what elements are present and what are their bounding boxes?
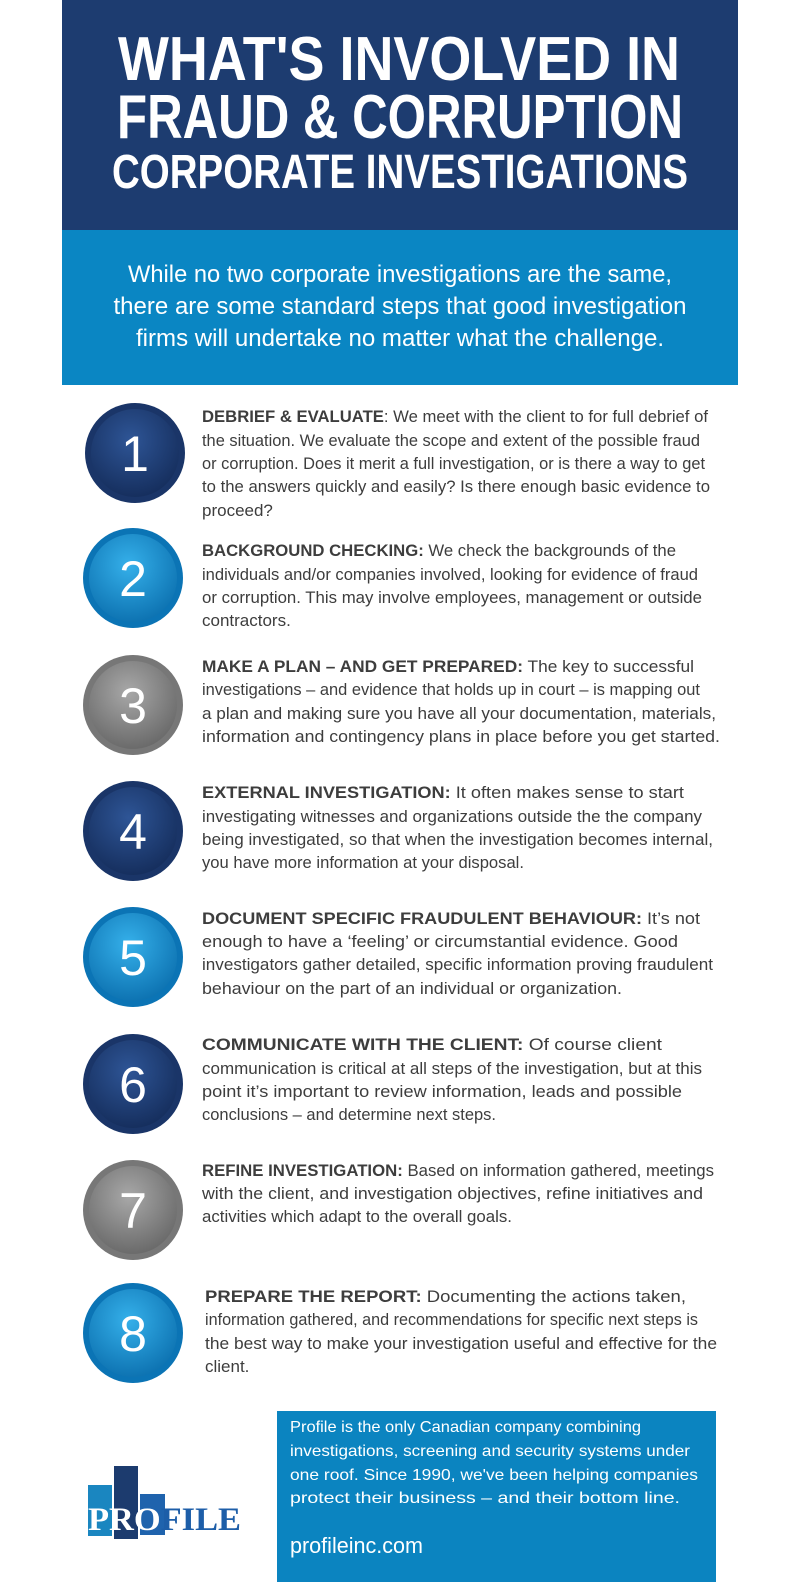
text: step 4: being investigated, so that when the investigation becomes internal, <box>202 830 713 849</box>
text: step 2: contractors. <box>202 611 291 630</box>
text: step 6 <box>202 1035 702 1124</box>
text: step 8: client. <box>205 1357 249 1376</box>
text: step 6: COMMUNICATE WITH THE CLIENT: Of course client <box>202 1035 662 1054</box>
icon: circle 2: 2 <box>119 551 147 607</box>
text: step 2: BACKGROUND CHECKING: We check the backgrounds of the <box>202 541 676 560</box>
text: step 4: you have more information at your disposal. <box>202 853 524 872</box>
logo: PROFILE <box>88 1466 241 1539</box>
icon: circle 3 <box>83 655 183 755</box>
text: step 3: investigations – and evidence that holds up in court – is mapping out <box>202 680 700 699</box>
step 8 <box>83 1283 717 1383</box>
text: step 6: communication is critical at all steps of the investigation, but at this <box>202 1059 702 1078</box>
text: step 2: or corruption. This may involve employees, management or outside <box>202 588 702 607</box>
icon: circle 4: 4 <box>119 804 147 860</box>
text: step 5: investigators gather detailed, specific information proving fraudulent <box>202 955 713 974</box>
text: step 8: the best way to make your investigation useful and effective for the <box>205 1334 717 1353</box>
footer callout: investigations, screening and security systems under <box>290 1443 691 1460</box>
text: step 1: proceed? <box>202 501 273 520</box>
icon: circle 7: 7 <box>119 1183 147 1239</box>
icon: circle 6: 6 <box>119 1057 147 1113</box>
intro band <box>62 230 738 385</box>
text: step 3 <box>202 657 720 746</box>
text: step 1 <box>202 407 710 520</box>
icon: circle 4 <box>83 781 183 881</box>
text: step 5: enough to have a ‘feeling’ or circumstantial evidence. Good <box>202 932 678 951</box>
icon: circle 8 <box>83 1283 183 1383</box>
text: step 8: PREPARE THE REPORT: Documenting the actions taken, <box>205 1287 686 1306</box>
footer callout: one roof. Since 1990, we've been helping companies <box>290 1467 698 1484</box>
step 3 <box>83 655 720 755</box>
text: step 4: investigating witnesses and organizations outside the the company <box>202 807 702 826</box>
icon: circle 5 <box>83 907 183 1007</box>
text: step 5: DOCUMENT SPECIFIC FRAUDULENT BEHAVIOUR: It’s not <box>202 909 700 928</box>
icon: circle 2 <box>83 528 183 628</box>
intro band: While no two corporate investigations are the same, <box>128 261 672 288</box>
text: step 4 <box>202 783 713 872</box>
intro band: there are some standard steps that good investigation <box>114 293 686 320</box>
icon: circle 3: 3 <box>119 678 147 734</box>
text: step 5 <box>202 909 713 998</box>
icon: circle 7 <box>83 1160 183 1260</box>
text: step 1: DEBRIEF & EVALUATE: We meet with the client to for full debrief of <box>202 407 708 426</box>
text: step 2 <box>202 541 702 630</box>
text: step 1: to the answers quickly and easily? Is there enough basic evidence to <box>202 477 710 496</box>
text: step 1: or corruption. Does it merit a full investigation, or is there a way to get <box>202 454 705 473</box>
text: step 3: a plan and making sure you have all your documentation, materials, <box>202 704 716 723</box>
text: step 2: individuals and/or companies involved, looking for evidence of fraud <box>202 565 698 584</box>
footer callout <box>277 1411 716 1582</box>
text: step 7 <box>201 1161 714 1226</box>
text: step 6: conclusions – and determine next steps. <box>202 1105 496 1124</box>
text: step 1: the situation. We evaluate the scope and extent of the possible fraud <box>202 431 700 450</box>
text: step 7: activities which adapt to the overall goals. <box>202 1207 512 1226</box>
title banner: WHAT'S INVOLVED IN <box>118 25 680 94</box>
intro band: firms will undertake no matter what the challenge. <box>136 325 664 352</box>
text: step 8 <box>205 1287 717 1376</box>
icon: circle 1 <box>85 403 185 503</box>
footer callout: profileinc.com <box>290 1533 423 1558</box>
icon: circle 8: 8 <box>119 1306 147 1362</box>
text: step 3: information and contingency plans in place before you get started. <box>202 727 720 746</box>
step 2 <box>83 528 702 630</box>
icon: circle 5: 5 <box>119 930 147 986</box>
text: step 7: REFINE INVESTIGATION: Based on information gathered, meetings <box>202 1161 714 1180</box>
step 6 <box>83 1034 702 1134</box>
text: step 4: EXTERNAL INVESTIGATION: It often makes sense to start <box>202 783 684 802</box>
icon: circle 6 <box>83 1034 183 1134</box>
step 1 <box>85 403 710 520</box>
step 7 <box>83 1160 714 1260</box>
icon: circle 1: 1 <box>121 426 149 482</box>
text: step 6: point it’s important to review information, leads and possible <box>202 1082 682 1101</box>
text: step 5: behaviour on the part of an individual or organization. <box>202 979 622 998</box>
logo: PROFILE: PROFILE <box>88 1502 241 1538</box>
text: step 7: with the client, and investigation objectives, refine initiatives and <box>201 1184 703 1203</box>
step 4 <box>83 781 713 881</box>
footer callout: protect their business – and their bottom line. <box>290 1490 680 1507</box>
title banner <box>62 0 738 230</box>
text: step 3: MAKE A PLAN – AND GET PREPARED: The key to successful <box>202 657 694 676</box>
footer callout: Profile is the only Canadian company combining <box>290 1419 641 1436</box>
text: step 8: information gathered, and recommendations for specific next steps is <box>205 1310 698 1329</box>
step 5 <box>83 907 713 1007</box>
